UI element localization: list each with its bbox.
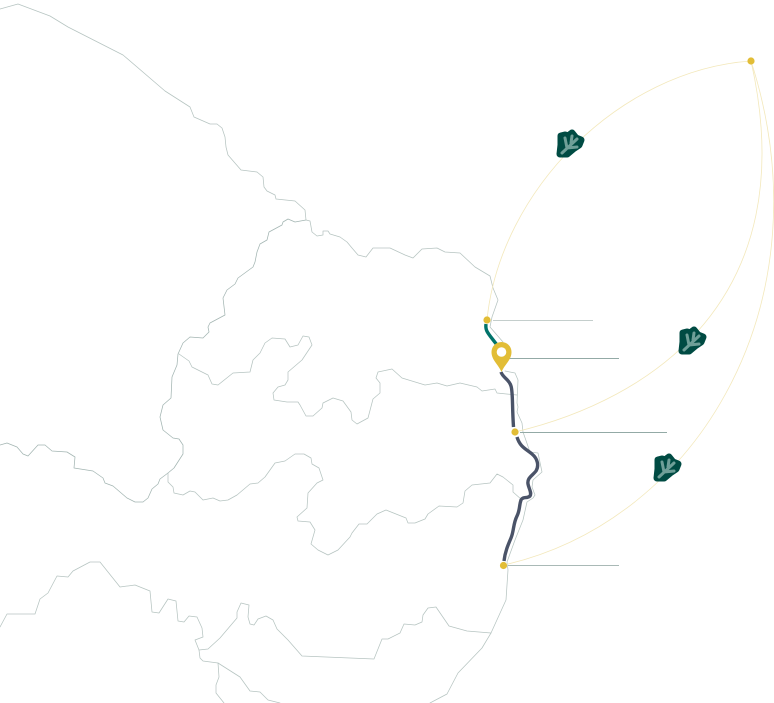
northern boundary — [0, 4, 306, 220]
leader lines — [493, 320, 667, 566]
stop markers — [483, 57, 755, 569]
southern valley boundary — [168, 454, 522, 555]
central valley boundary — [179, 336, 517, 424]
leader: pin — [508, 358, 619, 360]
leader: top stop — [493, 320, 593, 322]
icon: leaf south — [657, 457, 678, 478]
marker: top stop — [483, 316, 491, 324]
route segment north — [501, 372, 514, 427]
marker: middle stop — [511, 428, 519, 436]
map: terrain boundaries — [0, 4, 542, 703]
southern boundary west — [0, 562, 280, 703]
marker: far endpoint — [747, 57, 755, 65]
icon: leaf north — [560, 133, 581, 154]
icon: location pin — [492, 342, 512, 372]
arc: first stop — [487, 61, 751, 320]
arc: second stop — [515, 61, 762, 432]
southern spur — [216, 663, 224, 703]
western ridge — [0, 219, 306, 502]
route segment south — [504, 437, 538, 561]
icon: leaf middle — [682, 330, 703, 351]
arc: third stop — [504, 61, 774, 565]
connecting arcs — [487, 61, 774, 565]
river route: teal section — [486, 324, 497, 345]
northern ridge to coast — [306, 220, 503, 342]
marker: bottom stop — [500, 562, 507, 569]
leader: bottom stop — [508, 564, 619, 566]
leader: middle stop — [520, 432, 667, 434]
southern boundary east — [199, 603, 491, 659]
eastern coastline — [430, 371, 542, 703]
river route: navy section — [501, 372, 538, 561]
